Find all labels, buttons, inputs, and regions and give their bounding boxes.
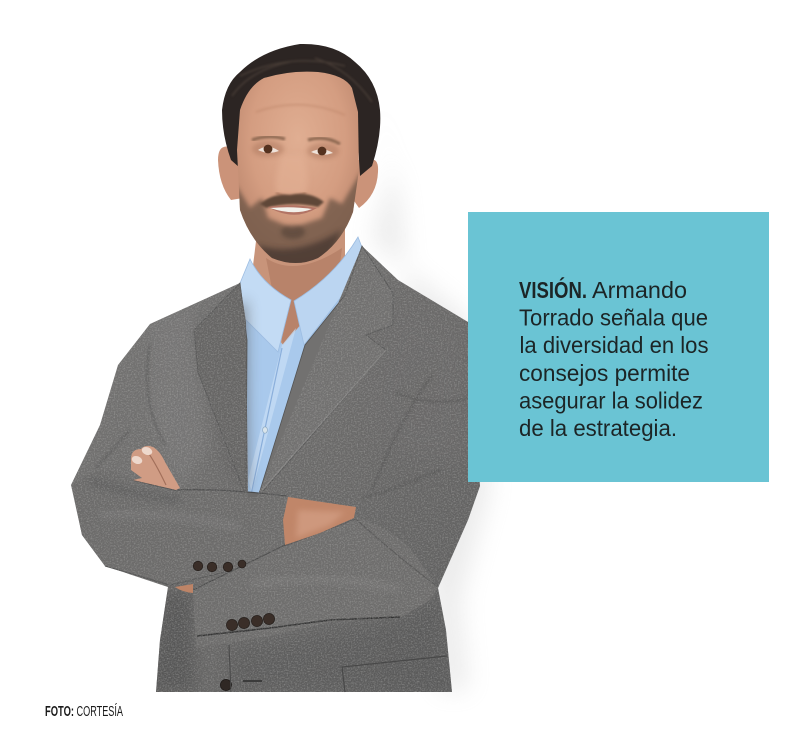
- head: hair: [222, 44, 380, 176]
- panel: caption box: [468, 212, 769, 482]
- caption text: asegurar la solidez: [519, 388, 703, 414]
- wrist and hand centre: [175, 497, 356, 593]
- left forearm: [72, 470, 287, 585]
- sleeve buttons upper cuff: [193, 560, 246, 572]
- shirt: [238, 237, 364, 498]
- hand under left arm: [131, 446, 180, 490]
- soft drop shadow behind figure: [372, 90, 490, 690]
- photo credit: [45, 703, 123, 720]
- shirt button: [263, 427, 267, 433]
- jacket: [71, 246, 480, 692]
- nostril shadow: [276, 193, 306, 196]
- eyebrows: [252, 137, 285, 140]
- right forearm: [193, 518, 438, 648]
- forehead highlight: [260, 104, 338, 112]
- jacket shading: [150, 300, 470, 692]
- caption text: Armando: [592, 277, 687, 303]
- caption text: Torrado señala que: [519, 304, 708, 330]
- caption text: la diversidad en los: [520, 332, 708, 358]
- eye sockets: [252, 141, 284, 157]
- sleeve buttons lower cuff: [226, 613, 275, 631]
- portrait photo: man in grey suit: [71, 44, 490, 692]
- jacket front button and pocket: [220, 645, 447, 692]
- jacket fabric texture: [71, 246, 480, 692]
- lapels: [194, 283, 247, 496]
- ears: [218, 147, 378, 208]
- mouth: [268, 205, 317, 215]
- photo credit: FOTO:: [45, 704, 74, 720]
- shirt collar: [238, 259, 291, 352]
- neck: [250, 225, 345, 352]
- caption text: [519, 276, 708, 441]
- nose highlight: [279, 177, 303, 191]
- beard stubble: [239, 172, 358, 263]
- caption text: VISIÓN.: [519, 276, 587, 303]
- caption text: consejos permite: [519, 360, 690, 386]
- head: face: [234, 72, 362, 272]
- eyes: [258, 147, 279, 153]
- caption text: de la estrategia.: [519, 415, 677, 441]
- mustache: [260, 194, 324, 208]
- fold lines: [96, 345, 468, 498]
- photo credit: CORTESÍA: [76, 703, 123, 720]
